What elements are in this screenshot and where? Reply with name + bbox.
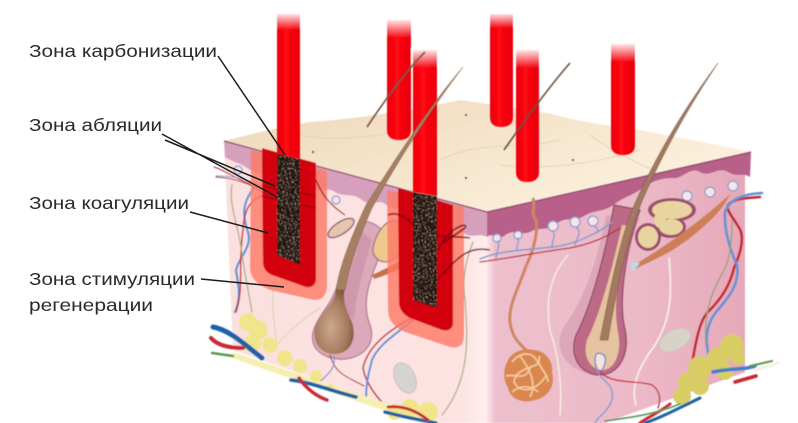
Pacinian corpuscles <box>389 323 695 397</box>
right plexus <box>480 222 612 259</box>
left skin face <box>224 141 487 423</box>
leader: carbonization <box>218 56 285 155</box>
beam 6 <box>611 44 635 155</box>
label: carbonization zone: Зона карбонизации <box>29 41 217 61</box>
arrector muscle middle <box>372 228 464 279</box>
vessels and nerves <box>214 167 762 423</box>
arrector muscle right <box>632 194 730 270</box>
sebaceous gland right <box>635 198 696 251</box>
left side vessels <box>235 188 254 312</box>
label: coagulation zone: Зона коагуляции <box>29 193 189 213</box>
hair shafts <box>336 52 718 340</box>
skin block <box>211 100 778 423</box>
sweat gland and duct <box>504 198 553 402</box>
beam 4 <box>490 14 513 127</box>
hair bulb <box>314 288 354 354</box>
short hair 1 <box>367 52 425 127</box>
beam 5 <box>516 50 539 182</box>
inner sheath <box>336 232 372 320</box>
label: regeneration: регенерации <box>29 295 153 315</box>
hair left main <box>336 67 463 290</box>
short hair 2 <box>504 63 570 150</box>
epidermis upper line <box>224 141 751 212</box>
sebaceous gland middle <box>373 221 404 262</box>
epidermis right <box>487 152 751 237</box>
follicle left <box>312 221 384 359</box>
leader: coagulation <box>190 212 268 233</box>
dermal papillae loops <box>234 166 738 242</box>
beam 1 <box>277 14 300 159</box>
pale nerves <box>548 255 568 415</box>
epidermis left <box>224 141 487 237</box>
middle vessels <box>363 317 413 408</box>
beam fades <box>275 12 637 68</box>
carbonization column 1 <box>277 154 300 265</box>
inner root <box>586 225 630 370</box>
outer halo <box>560 215 640 376</box>
coagulation zone 1 <box>262 148 316 287</box>
beam 3 <box>413 50 437 196</box>
carbonization column 2 <box>413 192 437 308</box>
sebaceous gland left <box>325 215 357 241</box>
leader: ablation <box>162 134 277 197</box>
bottom fat strip <box>232 352 440 423</box>
hair right main <box>600 63 718 340</box>
leader: stimulation <box>201 279 284 287</box>
fat lobules <box>232 313 745 423</box>
zone 1 vessels overlay <box>262 180 345 215</box>
follicle right <box>560 205 640 376</box>
stimulation layer, zone 1 <box>250 150 327 300</box>
papilla <box>595 353 605 370</box>
follicle right vessels <box>595 365 612 423</box>
surface creases <box>300 125 655 170</box>
beam 2 <box>387 20 411 140</box>
zone 2 vessels overlay <box>388 214 490 280</box>
leader lines <box>162 56 285 287</box>
right skin face <box>487 155 745 423</box>
bottom vessel bundles <box>211 327 778 423</box>
label: stimulation zone: Зона стимуляции <box>29 269 195 289</box>
right side vessels <box>692 197 760 364</box>
stimulation layer, zone 2 <box>387 190 464 348</box>
label: ablation zone: Зона абляции <box>29 115 162 135</box>
laser beams <box>275 12 637 196</box>
sheath <box>574 205 640 375</box>
outer sheath <box>312 221 384 359</box>
skin surface <box>224 100 751 212</box>
surface pores <box>312 114 574 179</box>
coagulation zone 2 <box>398 188 453 330</box>
